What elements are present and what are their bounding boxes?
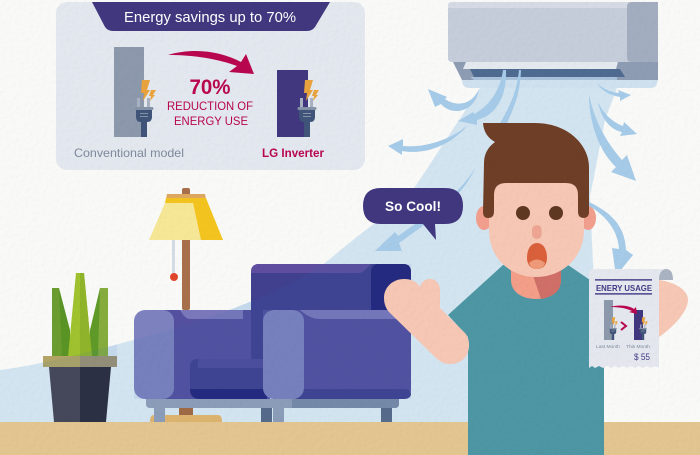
label: LG inverter: LG Inverter — [262, 146, 324, 160]
AC side panel — [627, 2, 658, 62]
torso — [448, 265, 604, 455]
AC under glow — [462, 80, 658, 88]
right arm — [650, 280, 688, 337]
receipt labels — [596, 344, 650, 350]
panel: energy savings — [56, 2, 365, 170]
AC body — [448, 2, 658, 62]
banner heading: Energy savings up to 70% — [124, 10, 296, 26]
reduction arrow — [168, 51, 254, 74]
receipt — [589, 269, 673, 368]
speech bubble: So Cool! — [385, 198, 441, 214]
AC vent slot — [470, 69, 625, 77]
receipt title: ENERY USAGE — [596, 283, 652, 293]
reduction text: REDUCTION OF — [167, 101, 253, 113]
conventional model bar with plug — [114, 47, 156, 137]
airflow arrows — [375, 70, 637, 251]
receipt curl — [659, 269, 673, 280]
mouth — [527, 243, 547, 269]
arrow 3 — [500, 70, 521, 123]
receipt paper — [589, 269, 666, 368]
arrow into receipt — [589, 202, 633, 276]
air flow beam — [0, 88, 617, 422]
reduction text — [167, 76, 253, 128]
sofa base and legs — [146, 399, 399, 422]
label: conventional model: Conventional model — [74, 146, 184, 160]
left arm and hand — [384, 279, 469, 364]
arrow 2 — [458, 70, 506, 125]
arrow 1 — [428, 89, 479, 111]
reduction text: 70% — [190, 76, 231, 99]
receipt labels: Last Month — [596, 344, 620, 350]
AC lower housing — [453, 62, 658, 80]
AC flap — [463, 62, 618, 69]
neck — [511, 267, 561, 299]
beam overlay — [43, 264, 411, 399]
sofa seats — [160, 310, 411, 399]
arrow 8 — [589, 94, 636, 181]
arrow 6 — [597, 83, 631, 101]
receipt labels: This Month — [626, 344, 650, 350]
banner heading — [92, 2, 330, 31]
face — [489, 183, 584, 277]
arrow 4 — [388, 125, 468, 155]
hair — [483, 123, 589, 218]
arrow 7 — [598, 102, 637, 136]
sofa — [134, 264, 411, 422]
receipt price: $ 55 — [634, 352, 650, 362]
sofa arm rests — [134, 310, 304, 399]
nose — [532, 225, 542, 239]
AC lower light band — [470, 77, 617, 80]
floor lamp — [149, 188, 223, 422]
eyes — [516, 206, 563, 220]
plant — [43, 273, 117, 422]
reduction text: ENERGY USE — [174, 116, 248, 128]
sofa back — [251, 264, 411, 358]
arrow 5 — [375, 168, 475, 251]
speech bubble — [363, 188, 463, 240]
ears — [476, 206, 596, 230]
receipt chart — [604, 300, 648, 340]
LG inverter bar with plug — [277, 70, 319, 137]
man — [384, 123, 688, 455]
AC top strip — [448, 2, 632, 8]
air conditioner — [448, 2, 658, 88]
floor — [0, 422, 700, 455]
